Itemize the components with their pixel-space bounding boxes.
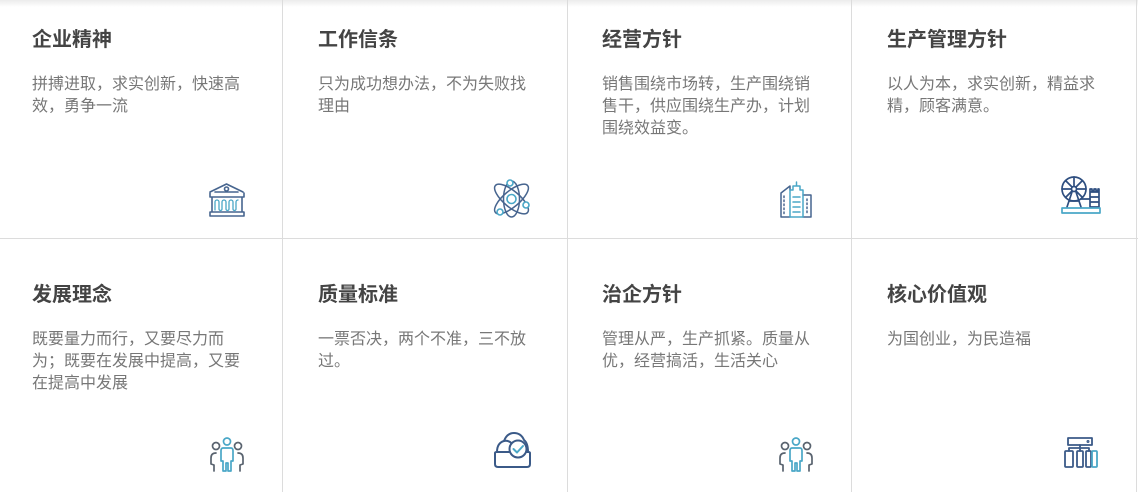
text: 治企方针 description: 管理从严，生产抓紧。质量从 — [602, 331, 810, 348]
heading: 核心价值观: 核心价值观 — [887, 284, 987, 306]
icon: bank building — [209, 183, 245, 217]
heading: 治企方针: 治企方针 — [602, 284, 682, 306]
text: 经营方针 description: 围绕效益变。 — [602, 120, 698, 137]
icon: three people — [779, 437, 813, 472]
heading: 工作信条: 工作信条 — [318, 29, 398, 51]
panel: 企业精神 — [32, 28, 240, 115]
text: 质量标准 description: 一票否决，两个不准，三不放 — [318, 331, 526, 348]
text: 经营方针 description — [602, 75, 810, 137]
text: 企业精神 description: 效，勇争一流 — [32, 98, 128, 115]
text: 工作信条 description: 理由 — [318, 98, 350, 115]
text: 工作信条 description: 只为成功想办法，不为失败找 — [318, 76, 526, 93]
icon: atom — [494, 179, 530, 218]
text: 发展理念 description: 在提高中发展 — [32, 375, 128, 392]
text: 核心价值观 description: 为国创业，为民造福 — [887, 331, 1031, 348]
text: 发展理念 description — [32, 330, 240, 392]
heading: 生产管理方针: 生产管理方针 — [887, 29, 1007, 51]
icon: water wheel machine — [1061, 176, 1101, 214]
text: 发展理念 description: 为；既要在发展中提高，又要 — [32, 353, 240, 370]
panel: 工作信条 — [318, 28, 526, 115]
icon: hierarchy of devices — [1064, 437, 1098, 468]
panel: 经营方针 — [602, 28, 810, 137]
text: 企业精神 description: 拼搏进取，求实创新，快速高 — [32, 76, 240, 93]
text: 经营方针 description: 售干，供应围绕生产办，计划 — [602, 98, 810, 115]
text: 经营方针 description: 销售围绕市场转，生产围绕销 — [602, 76, 810, 93]
text: 治企方针 description: 优，经营搞活，生活关心 — [602, 353, 778, 370]
text: 生产管理方针 description: 精，顾客满意。 — [887, 98, 999, 115]
panel: 治企方针 — [602, 284, 810, 370]
panel: 核心价值观 — [887, 284, 1031, 348]
heading: 发展理念: 发展理念 — [32, 284, 112, 306]
text: 工作信条 description — [318, 75, 526, 115]
text: 质量标准 description — [318, 330, 526, 370]
icon: three people — [210, 437, 244, 472]
icon: office buildings — [780, 181, 812, 218]
panel: 发展理念 — [32, 284, 240, 392]
panel: 生产管理方针 — [887, 28, 1095, 115]
text: 企业精神 description — [32, 75, 240, 115]
text: 治企方针 description — [602, 330, 810, 370]
icon: box with check mark — [494, 432, 531, 468]
heading: 企业精神: 企业精神 — [32, 29, 112, 51]
heading: 质量标准: 质量标准 — [318, 284, 398, 306]
text: 发展理念 description: 既要量力而行，又要尽力而 — [32, 331, 224, 348]
panel: 质量标准 — [318, 284, 526, 370]
text: 生产管理方针 description — [887, 75, 1095, 115]
text: 生产管理方针 description: 以人为本，求实创新，精益求 — [887, 76, 1095, 93]
heading: 经营方针: 经营方针 — [602, 29, 682, 51]
text: 质量标准 description: 过。 — [318, 353, 350, 370]
